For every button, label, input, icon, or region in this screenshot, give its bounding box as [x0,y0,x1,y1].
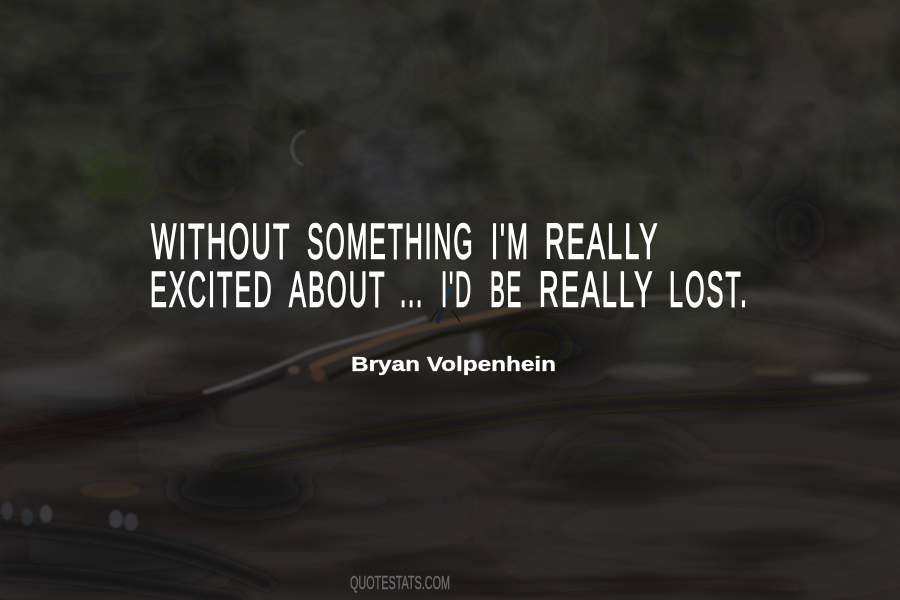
quote line 1: WITHOUT [151,213,292,269]
quote line 2: EXCITED [150,261,274,317]
quote line 2: LOST. [669,261,749,317]
quote line 2 [150,261,749,317]
quote line 2: ABOUT [289,261,387,317]
quote line 1: I'M [491,213,530,269]
quote text [150,213,749,317]
author name: Bryan Volpenhein [351,353,556,376]
quote line 1: REALLY [545,213,660,269]
quote line 2: BE [490,261,523,317]
quote line 2: I'D [441,261,473,317]
dragonfly [430,288,460,322]
quote line 1 [151,213,660,269]
watermark: QUOTESTATS.COM [350,573,450,593]
small bright bokeh and moon details [1,131,305,531]
quote line 2: REALLY [539,261,655,317]
main branch [125,297,730,422]
quote line 1: SOMETHING [307,213,475,269]
quote line 2: ... [400,261,424,317]
